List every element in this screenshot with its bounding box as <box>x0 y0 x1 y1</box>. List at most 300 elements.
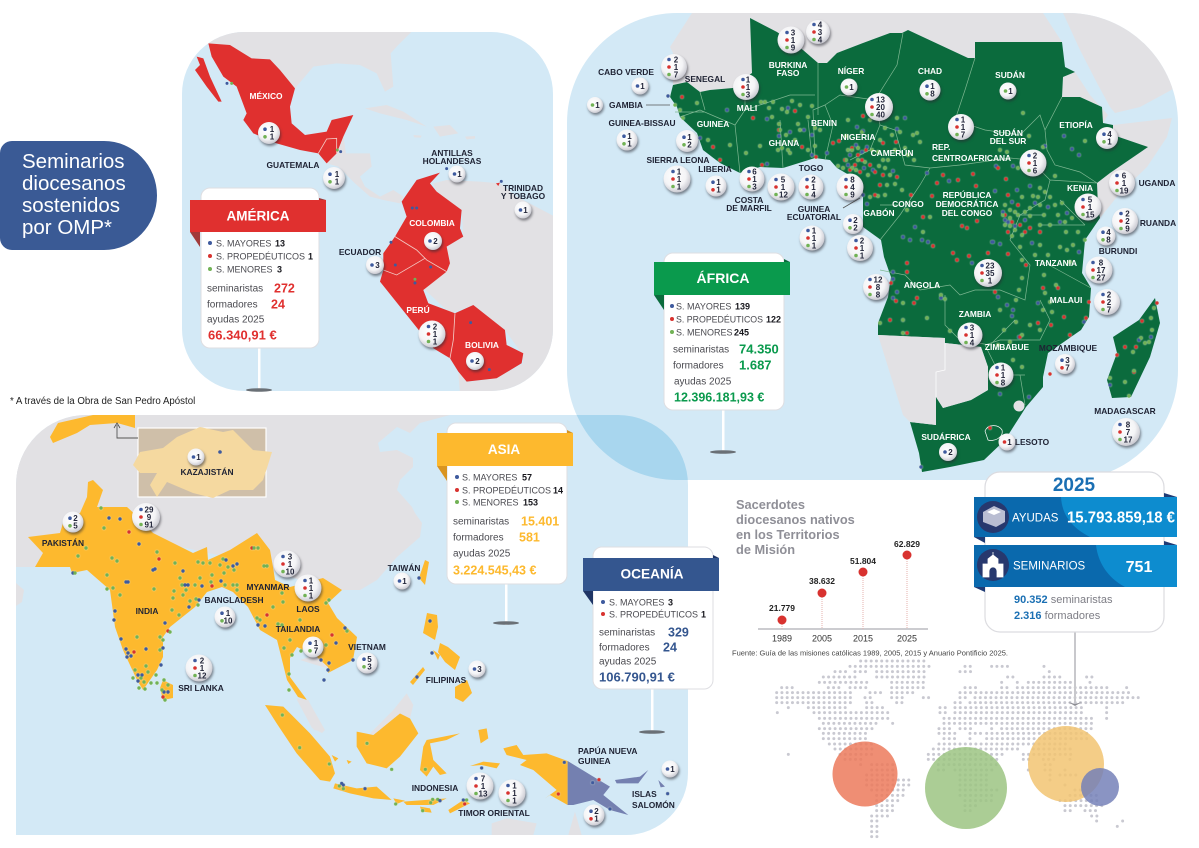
chart: Sacerdotes diocesanos nativos: 62.829 <box>894 539 920 549</box>
labels: África: COSTA <box>735 195 763 205</box>
bubbles: África: 1 <box>860 244 865 253</box>
bubbles: Asia and Oceanía: 1 <box>226 609 231 618</box>
bubbles: África: 1 <box>677 167 682 176</box>
labels: América: GUATEMALA <box>267 160 319 170</box>
bubbles: África: 35 <box>986 269 995 278</box>
bubbles: África: 1 <box>849 83 854 92</box>
bubbles: África: 19 <box>1120 186 1129 195</box>
card: Oceanía: S. MAYORES <box>609 598 664 608</box>
card: Asia: 581 <box>519 530 540 544</box>
labels: África: CAMERÚN <box>871 147 913 158</box>
card: África: 245 <box>734 328 749 338</box>
labels: África: FASO <box>777 68 800 78</box>
card: 2025 totals <box>974 472 1177 706</box>
card: África: 139 <box>735 302 750 312</box>
chart: Sacerdotes diocesanos nativos: 1989 <box>772 634 792 644</box>
card: Oceanía: ayudas 2025 <box>599 656 657 668</box>
card: África: formadores <box>673 360 724 372</box>
map: Mexico <box>195 43 353 163</box>
labels: África: ZIMBABUE <box>985 342 1030 352</box>
ribbon: ayudas: 15.793.859,18 € <box>1067 510 1175 526</box>
bubbles: África: 9 <box>791 43 796 52</box>
labels: África: GHANA <box>769 138 799 148</box>
labels: África: GUINEA <box>798 204 830 214</box>
bubbles: África: 1 <box>860 251 865 260</box>
card: Asia: 3.224.545,43 € <box>453 564 536 578</box>
bubbles: África: 2 <box>674 55 679 64</box>
card: 2025 totals: 2025 <box>1053 475 1096 496</box>
labels: Asia: TAILANDIA <box>276 624 320 634</box>
bubbles: Asia and Oceanía: 91 <box>145 520 154 529</box>
map: Asia seminary dots <box>73 508 668 811</box>
labels: América: TRINIDAD <box>503 183 543 193</box>
inset: Kazakhstan <box>114 423 272 498</box>
bubbles: América: 1 <box>433 337 438 346</box>
card: América: 1 <box>308 252 313 262</box>
bubbles: África: 2 <box>948 448 953 457</box>
bubbles: África: 7 <box>1065 364 1070 373</box>
bubbles: África: 13 <box>876 95 885 104</box>
labels: África: ECUATORIAL <box>787 212 841 222</box>
bubbles: África: 1 <box>1001 363 1006 372</box>
chart: Sacerdotes diocesanos nativos: Fuente: Guía de las misiones católicas 1989, 2005, 2015 y Anuario Pontificio 2025. <box>732 648 1008 658</box>
bubbles: África: 27 <box>1097 273 1106 282</box>
bubbles: América: 3 <box>375 261 380 270</box>
labels: Asia: INDIA <box>136 606 158 616</box>
bubbles: América <box>258 122 532 370</box>
labels: Asia: PAPÚA NUEVA <box>578 745 637 756</box>
bubbles: África: 1 <box>1107 138 1112 147</box>
card: Oceanía: 329 <box>668 626 689 640</box>
bubbles: Asia and Oceanía: 1 <box>402 577 407 586</box>
card: América: 3 <box>277 264 282 274</box>
labels: África: ZAMBIA <box>959 309 991 319</box>
chart: Sacerdotes diocesanos nativos: 2025 <box>897 634 917 644</box>
bubbles: África: 1 <box>781 183 786 192</box>
bubbles: Asia and Oceanía: 5 <box>367 655 372 664</box>
labels: Asia: GUINEA <box>578 756 611 766</box>
labels: África: LIBERIA <box>698 164 732 174</box>
bubbles: África: 3 <box>1065 356 1070 365</box>
bubbles: África: 1 <box>627 140 632 149</box>
labels: África: CHAD <box>918 66 942 76</box>
labels: África: MALAUI <box>1050 295 1082 305</box>
ribbon: seminarios: 751 <box>1126 559 1152 576</box>
card: Asia: ASIA <box>488 442 520 457</box>
bubbles: África: 1 <box>677 175 682 184</box>
bubbles: África: 1 <box>811 183 816 192</box>
labels: África: DE MARFIL <box>726 203 772 213</box>
bubbles: África: 2 <box>1107 298 1112 307</box>
labels: Asia: INDONESIA <box>412 783 458 793</box>
card: África: S. MAYORES <box>676 302 731 312</box>
labels: América: Y TOBAGO <box>501 191 546 201</box>
bubbles: Asia and Oceanía: 1 <box>309 576 314 585</box>
card: América <box>190 188 326 392</box>
bubbles: África: 1 <box>595 101 600 110</box>
bubbles: América: 1 <box>335 178 340 187</box>
bubbles: Asia and Oceanía: 1 <box>314 639 319 648</box>
bubbles: África: 1 <box>1007 438 1012 447</box>
card: Asia: 15.401 <box>521 514 559 528</box>
bubbles: África: 3 <box>746 90 751 99</box>
labels: América: HOLANDESAS <box>423 156 482 166</box>
bubbles: África: 2 <box>853 216 858 225</box>
panel: America map <box>182 30 555 393</box>
card: Asia: S. MAYORES <box>462 472 517 482</box>
card: Asia: 153 <box>523 498 538 508</box>
ribbon: seminarios <box>974 541 1177 592</box>
bubbles: África: 8 <box>876 283 881 292</box>
map: Colombia, Ecuador, Peru and Bolivia <box>380 173 523 382</box>
chart: Sacerdotes diocesanos nativos: Sacerdotes <box>736 497 805 512</box>
card: América: 24 <box>271 298 285 312</box>
card: Asia: ayudas 2025 <box>453 548 511 560</box>
bubbles: África: 1 <box>687 133 692 142</box>
inset: Kazakhstan: KAZAJISTÁN <box>180 466 234 477</box>
card: África: 1.687 <box>739 358 772 372</box>
card: Oceanía: 3 <box>668 598 673 608</box>
bubbles: África: 17 <box>1124 435 1133 444</box>
title: Seminarios <box>22 150 125 173</box>
card: África: ayudas 2025 <box>674 376 732 388</box>
bubbles: Asia and Oceanía <box>62 503 678 826</box>
bubbles: África: 1 <box>746 75 751 84</box>
panel: Asia map <box>16 415 688 835</box>
labels: África: SUDÁN <box>995 69 1025 80</box>
bubbles: Asia and Oceanía: 1 <box>481 782 486 791</box>
bubbles: África: 1 <box>930 82 935 91</box>
labels: Asia: SRI LANKA <box>178 683 224 693</box>
bubbles: África: 1 <box>716 186 721 195</box>
bubbles: América: 2 <box>475 357 480 366</box>
bubbles: África: 3 <box>752 182 757 191</box>
bubbles: América: 1 <box>270 125 275 134</box>
bubbles: África <box>587 20 1140 461</box>
bubbles: África: 1 <box>961 123 966 132</box>
bubbles: Asia and Oceanía: 10 <box>286 567 295 576</box>
bubbles: África: 1 <box>746 83 751 92</box>
bubbles: África: 4 <box>850 183 855 192</box>
bubbles: Asia and Oceanía: 3 <box>288 552 293 561</box>
bubbles: Asia and Oceanía: 1 <box>512 789 517 798</box>
bubbles: África: 4 <box>1106 228 1111 237</box>
labels: África: CENTROAFRICANA <box>932 153 1011 163</box>
labels: África: GABÓN <box>863 207 895 218</box>
labels: Asia: TAIWÁN <box>388 562 420 573</box>
labels: América: PERÚ <box>406 304 430 315</box>
ribbon: ayudas: AYUDAS <box>1012 512 1059 524</box>
labels: África: TANZANIA <box>1035 258 1077 268</box>
bubbles: África: 1 <box>970 331 975 340</box>
bubbles: África: 17 <box>1097 266 1106 275</box>
labels: África: GAMBIA <box>609 100 643 110</box>
card: América: 13 <box>275 238 285 248</box>
map: African continent <box>670 18 1148 472</box>
labels: África: MOZAMBIQUE <box>1039 343 1097 353</box>
labels: América: COLOMBIA <box>409 218 455 228</box>
card: Oceanía: 24 <box>663 640 677 654</box>
card: África <box>654 253 790 454</box>
bubbles: África: 15 <box>1086 210 1095 219</box>
bubbles: África: 8 <box>850 175 855 184</box>
bubbles: África: 9 <box>1125 224 1130 233</box>
bubbles: África: 1 <box>812 226 817 235</box>
labels: África: NÍGER <box>838 65 864 76</box>
bubbles: África: 40 <box>876 110 885 119</box>
labels: África: MADAGASCAR <box>1094 406 1156 416</box>
labels: África <box>598 60 1176 447</box>
bubbles: África: 8 <box>1001 378 1006 387</box>
labels: África: SENEGAL <box>685 74 725 84</box>
labels: América: ANTILLAS <box>431 148 473 158</box>
map: Indonesia <box>265 693 665 835</box>
map: Sri Lanka <box>160 680 173 700</box>
bubbles: África: 2 <box>1125 209 1130 218</box>
footnote: * A través de la Obra de San Pedro Apóstol <box>10 396 195 407</box>
bubbles: África: 3 <box>791 28 796 37</box>
bubbles: África: 12 <box>874 275 883 284</box>
bubbles: Asia and Oceanía: 1 <box>200 664 205 673</box>
bubbles: África: 2 <box>1125 217 1130 226</box>
bubbles: Asia and Oceanía: 2 <box>200 656 205 665</box>
bubbles: Asia and Oceanía: 13 <box>479 789 488 798</box>
labels: África: RUANDA <box>1140 218 1176 228</box>
bubbles: África: 2 <box>860 236 865 245</box>
labels: Asia <box>42 537 675 818</box>
card: África: ÁFRICA <box>697 270 749 286</box>
card: África: S. MENORES <box>676 328 733 338</box>
chart: Sacerdotes diocesanos nativos: 2015 <box>853 634 873 644</box>
bubbles: África: 1 <box>1088 203 1093 212</box>
card: África: 12.396.181,93 € <box>674 390 764 404</box>
bubbles: África: 1 <box>961 115 966 124</box>
bubbles: África: 1 <box>752 175 757 184</box>
bubbles: América: 1 <box>335 170 340 179</box>
bubbles: África: 8 <box>1106 236 1111 245</box>
card: Asia: S. PROPEDÉUTICOS <box>462 486 551 496</box>
ribbon: ayudas <box>974 493 1177 543</box>
card: Asia: seminaristas <box>453 516 509 528</box>
bubbles: África: 2 <box>853 224 858 233</box>
bubbles: América: 2 <box>433 322 438 331</box>
labels: América: BOLIVIA <box>465 340 499 350</box>
card: América: S. MAYORES <box>216 238 271 248</box>
title <box>0 141 157 250</box>
chart: Sacerdotes diocesanos nativos <box>732 497 1008 658</box>
bubbles: África: 7 <box>1126 428 1131 437</box>
labels: Asia: BANGLADESH <box>204 595 264 605</box>
chart: Sacerdotes diocesanos nativos: de Misión <box>736 542 795 557</box>
bubbles: África: 7 <box>1107 305 1112 314</box>
labels: Asia: FILIPINAS <box>426 675 467 685</box>
bubbles: África: 1 <box>1122 179 1127 188</box>
bubbles: África: 4 <box>818 20 823 29</box>
panel: Africa map <box>567 13 1178 480</box>
bubbles: Asia and Oceanía: 2 <box>73 514 78 523</box>
map: Taiwan and Philippines <box>410 560 472 702</box>
labels: África: BURUNDI <box>1099 246 1137 256</box>
bubbles: África: 12 <box>779 190 788 199</box>
bubbles: África: 7 <box>961 130 966 139</box>
card: Oceanía: OCEANÍA <box>620 566 684 582</box>
bubbles: África: 4 <box>1107 130 1112 139</box>
labels: África: CABO VERDE <box>598 67 654 77</box>
labels: Asia: VIETNAM <box>348 642 386 652</box>
labels: África: SUDÁN <box>993 127 1023 138</box>
bubbles: África: 2 <box>1033 151 1038 160</box>
chart: Sacerdotes diocesanos nativos: 2005 <box>812 634 832 644</box>
chart: Sacerdotes diocesanos nativos: en los Territorios <box>736 527 840 542</box>
bubbles: África: 4 <box>811 190 816 199</box>
bubbles: África: 7 <box>674 70 679 79</box>
labels: África: CONGO <box>892 199 924 209</box>
labels: Asia: SALOMÓN <box>632 799 675 810</box>
labels: África: GUINEA <box>697 119 729 129</box>
chart: Sacerdotes diocesanos nativos: 51.804 <box>850 556 876 566</box>
bubbles: África: 2 <box>811 175 816 184</box>
bubbles: Asia and Oceanía: 3 <box>367 663 372 672</box>
labels: África: DEL CONGO <box>942 208 993 218</box>
card: América: S. MENORES <box>216 264 273 274</box>
labels: Asia: TIMOR ORIENTAL <box>458 808 530 818</box>
bubbles: Asia and Oceanía: 1 <box>594 815 599 824</box>
card: América: S. PROPEDÉUTICOS <box>216 252 305 262</box>
bubbles: Asia and Oceanía: 1 <box>288 560 293 569</box>
labels: Asia: ISLAS <box>632 789 657 799</box>
world dot map with continent circles <box>777 661 1139 837</box>
bubbles: África: 1 <box>988 276 993 285</box>
labels: África: ANGOLA <box>904 280 940 290</box>
card: Oceanía: 106.790,91 € <box>599 670 675 684</box>
labels: África: BURKINA <box>769 60 807 70</box>
bubbles: África: 23 <box>986 261 995 270</box>
card: Oceanía: S. PROPEDÉUTICOS <box>609 610 698 620</box>
chart: Sacerdotes diocesanos nativos: 21.779 <box>769 603 795 613</box>
card: África: S. PROPEDÉUTICOS <box>676 314 763 324</box>
card: Asia: 14 <box>553 486 563 496</box>
map: Namibia and Botswana <box>878 335 988 425</box>
bubbles: Asia and Oceanía: 10 <box>224 617 233 626</box>
bubbles: Asia and Oceanía: 9 <box>147 513 152 522</box>
inset: Kazakhstan: 1 <box>196 453 201 462</box>
card: Oceanía <box>583 547 719 734</box>
card: Asia <box>437 423 573 625</box>
bubbles: América: 2 <box>433 237 438 246</box>
bubbles: Asia and Oceanía: 1 <box>512 796 517 805</box>
labels: África: REPÚBLICA <box>943 189 991 200</box>
map: India and South Asia <box>28 480 357 700</box>
bubbles: Asia and Oceanía: 29 <box>145 505 154 514</box>
bubbles: África: 3 <box>818 28 823 37</box>
bubbles: Asia and Oceanía: 1 <box>512 781 517 790</box>
labels: Asia: LAOS <box>296 604 320 614</box>
card: 2025 totals: 90.352 seminaristas <box>1014 594 1113 606</box>
labels: América <box>249 90 546 350</box>
bubbles: África: 2 <box>687 141 692 150</box>
title: diocesanos <box>22 172 126 195</box>
labels: África: SUDÁFRICA <box>921 431 971 442</box>
bubbles: África: 3 <box>970 323 975 332</box>
bubbles: África: 1 <box>640 82 645 91</box>
map: Africa seminary dots <box>668 96 1157 467</box>
bubbles: África: 9 <box>850 190 855 199</box>
bubbles: África: 1 <box>1033 159 1038 168</box>
bubbles: África: 6 <box>1033 166 1038 175</box>
ribbon: seminarios: SEMINARIOS <box>1013 560 1086 572</box>
bubbles: África: 6 <box>752 167 757 176</box>
card: África: 122 <box>766 314 781 324</box>
bubbles: África: 8 <box>1126 420 1131 429</box>
bubbles: África: 1 <box>716 178 721 187</box>
labels: América: ECUADOR <box>339 247 381 257</box>
card: América: AMÉRICA <box>226 208 290 224</box>
bubbles: África: 1 <box>674 63 679 72</box>
card: Oceanía: seminaristas <box>599 628 655 638</box>
card: África: 74.350 <box>739 342 779 356</box>
map: Madagascar <box>1107 298 1160 398</box>
bubbles: Asia and Oceanía: 7 <box>314 647 319 656</box>
labels: África: MALI <box>737 103 757 113</box>
bubbles: Asia and Oceanía: 5 <box>73 522 78 531</box>
bubbles: África: 1 <box>1001 371 1006 380</box>
card: América: formadores <box>207 300 258 310</box>
card: Asia: formadores <box>453 532 504 544</box>
labels: Asia: MYANMAR <box>247 582 289 592</box>
labels: África: GUINEA-BISSAU <box>608 118 676 128</box>
bubbles: Asia and Oceanía: 1 <box>670 765 675 774</box>
card: Oceanía: formadores <box>599 642 650 654</box>
bubbles: África: 1 <box>812 241 817 250</box>
bubbles: África: 4 <box>970 338 975 347</box>
labels: Asia: PAKISTÁN <box>42 537 84 548</box>
chart: Sacerdotes diocesanos nativos: diocesanos nativos <box>736 512 855 527</box>
bubbles: África: 2 <box>1107 290 1112 299</box>
bubbles: Asia and Oceanía: 7 <box>481 774 486 783</box>
labels: África: DEMOCRÁTICA <box>936 198 998 209</box>
bubbles: Asia and Oceanía: 1 <box>309 584 314 593</box>
bubbles: África: 1 <box>791 36 796 45</box>
labels: África: NIGERIA <box>841 132 875 142</box>
bubbles: Asia and Oceanía: 2 <box>594 807 599 816</box>
bubbles: África: 8 <box>930 90 935 99</box>
card: África: seminaristas <box>673 344 729 356</box>
card: Asia: S. MENORES <box>462 498 519 508</box>
bubbles: África: 1 <box>627 132 632 141</box>
card: América: 66.340,91 € <box>208 328 277 342</box>
labels: África: DEL SUR <box>990 136 1026 146</box>
card: Oceanía: 1 <box>701 610 706 620</box>
bubbles: África: 1 <box>1008 87 1013 96</box>
bubbles: África: 6 <box>1122 171 1127 180</box>
bubbles: África: 20 <box>876 103 885 112</box>
bubbles: América: 1 <box>457 170 462 179</box>
bubbles: África: 1 <box>812 234 817 243</box>
card: Asia: 57 <box>522 472 532 482</box>
bubbles: África: 1 <box>677 182 682 191</box>
labels: África: KENIA <box>1067 183 1093 193</box>
labels: África: LESOTO <box>1015 437 1050 447</box>
bubbles: Asia and Oceanía: 1 <box>309 591 314 600</box>
chart: Sacerdotes diocesanos nativos: 38.632 <box>809 576 835 586</box>
card: América: ayudas 2025 <box>207 314 265 326</box>
bubbles: África: 5 <box>1088 195 1093 204</box>
bubbles: América: 1 <box>270 133 275 142</box>
bubbles: Asia and Oceanía: 12 <box>198 671 207 680</box>
labels: África: REP. <box>932 142 950 152</box>
bubbles: África: 5 <box>781 175 786 184</box>
bubbles: África: 8 <box>1099 258 1104 267</box>
